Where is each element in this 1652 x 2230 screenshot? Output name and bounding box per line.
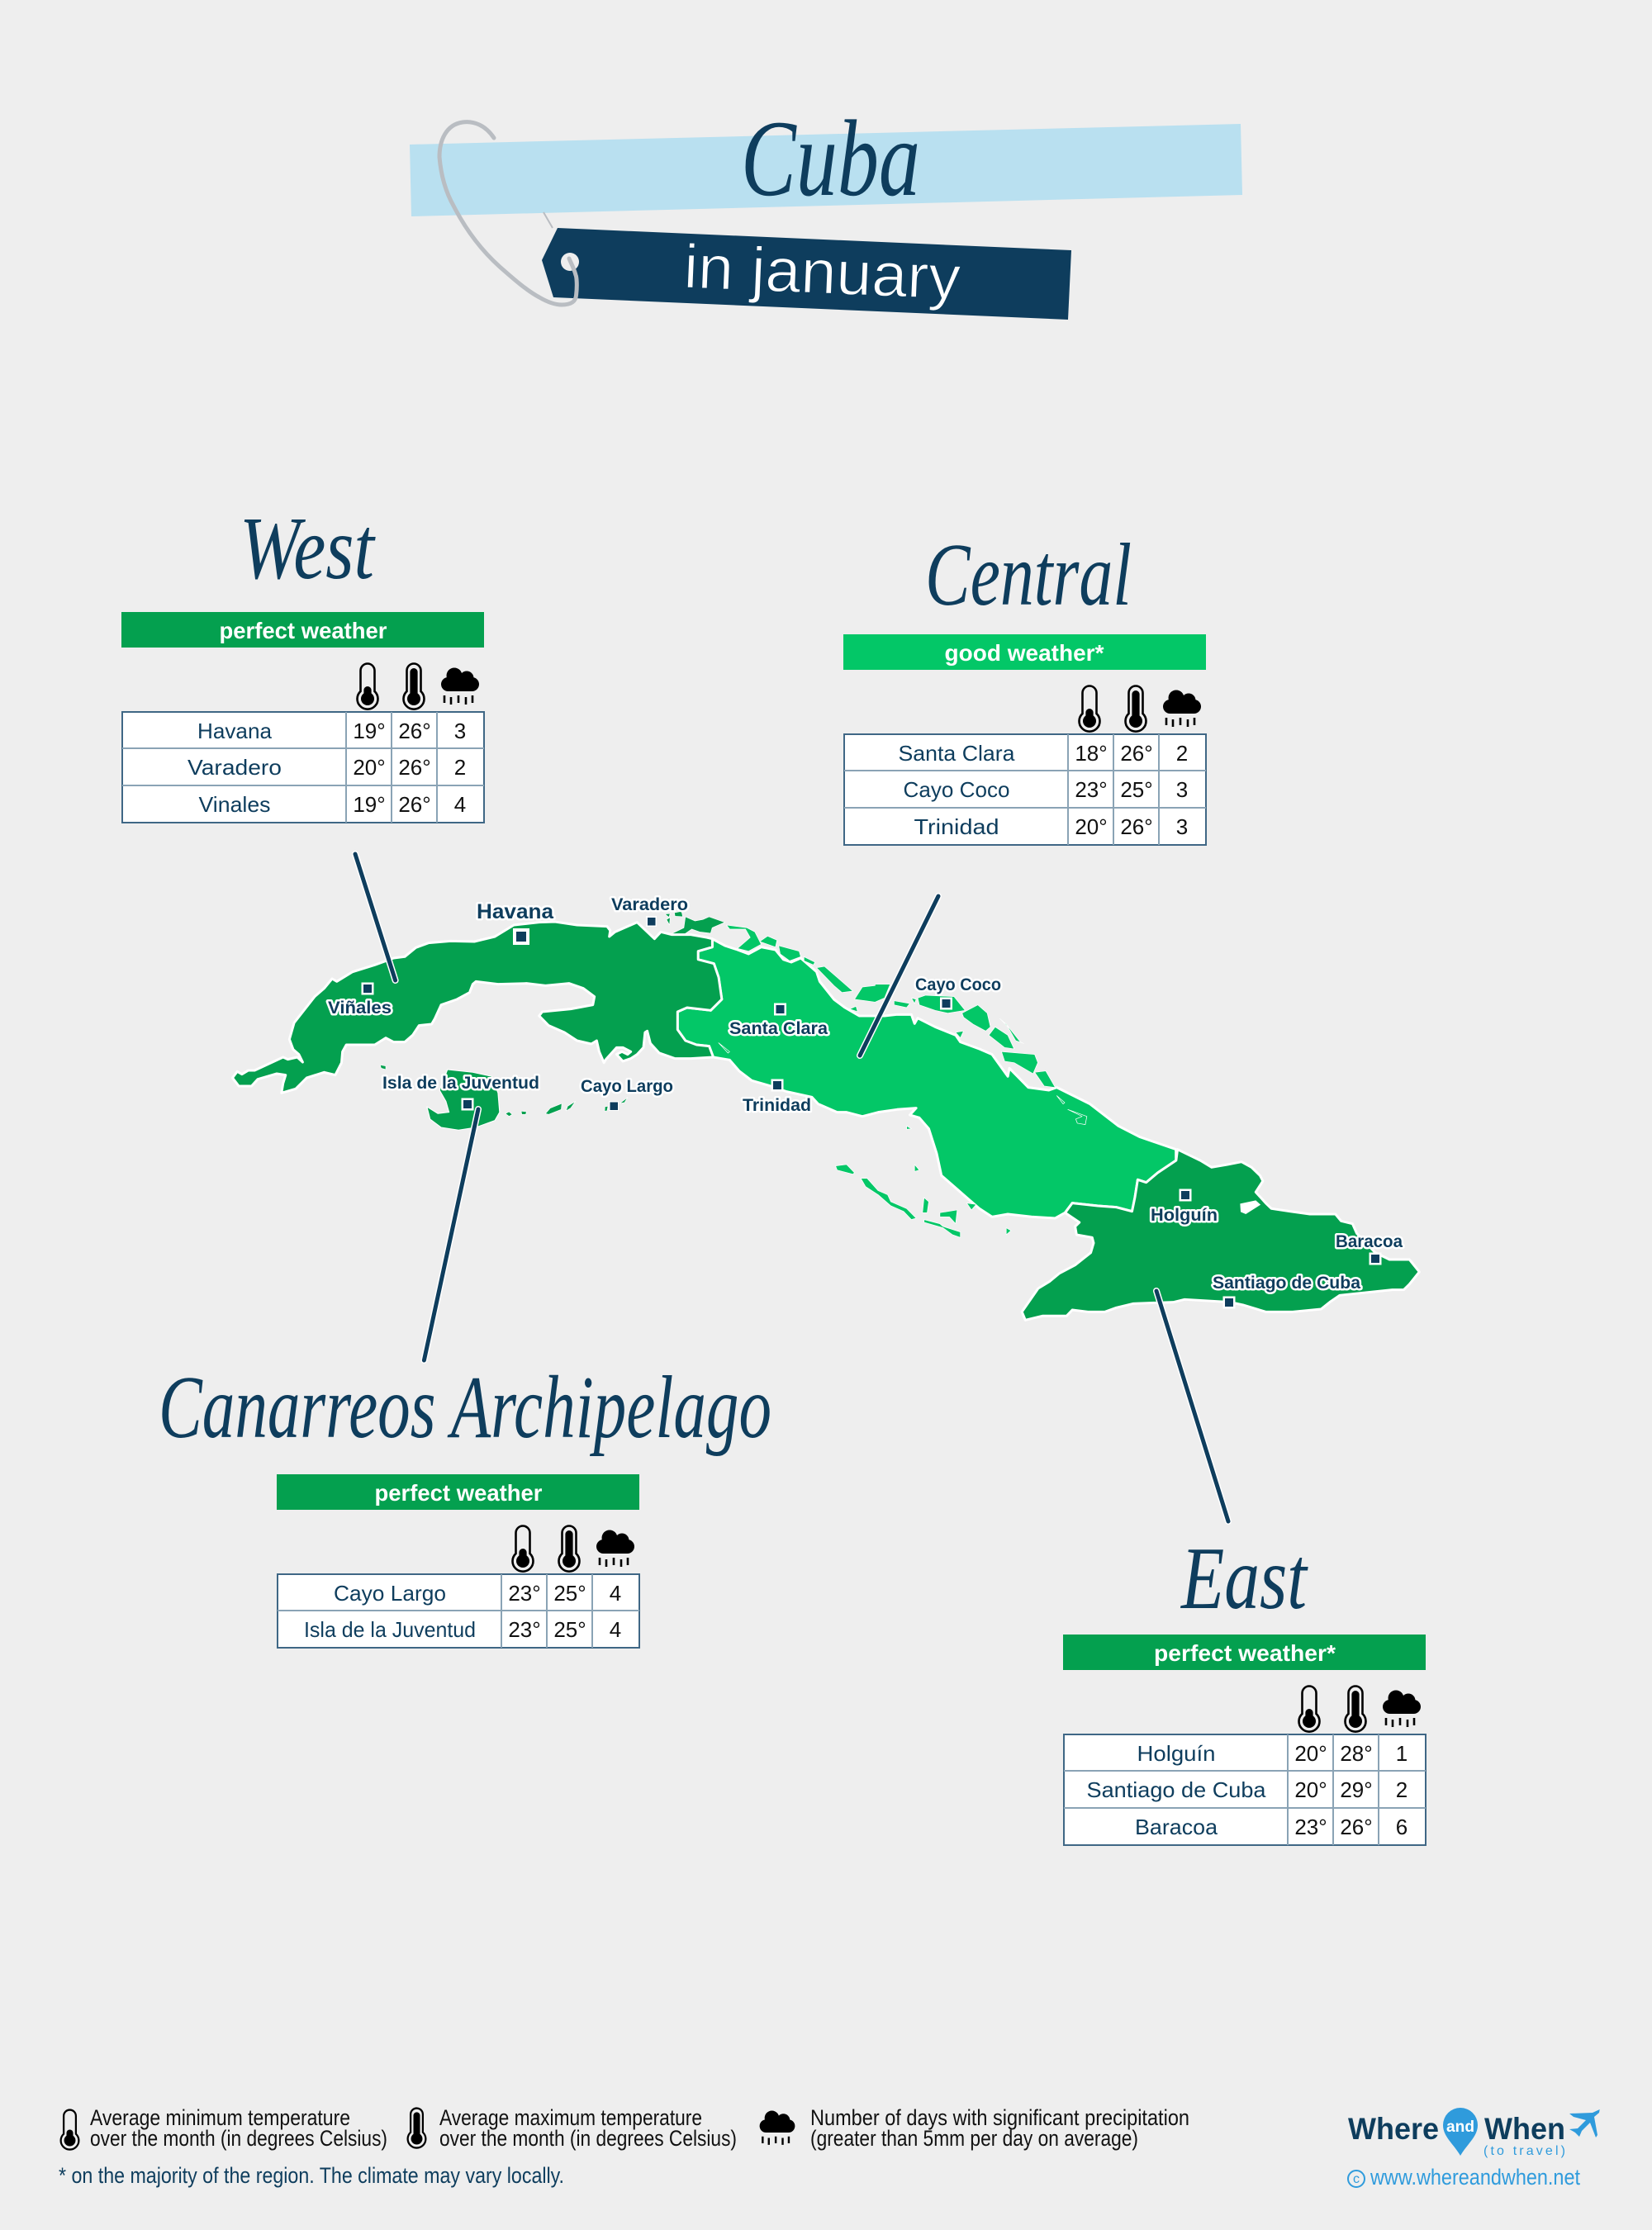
- marker: Varadero: [646, 916, 657, 927]
- marker: Havana: [513, 928, 529, 945]
- icon: copyright circle: [1348, 2171, 1365, 2187]
- label: Santa Clara: Santa Clara: [729, 1019, 828, 1038]
- marker: Santiago de Cuba: [1222, 1297, 1236, 1308]
- label: Baracoa: Baracoa: [1336, 1232, 1403, 1251]
- table: Cayo Coco: [904, 777, 1009, 802]
- icon: min thermometer: [357, 664, 378, 709]
- table: 25°: [553, 1617, 586, 1642]
- icon: min thermometer: [512, 1526, 534, 1572]
- title: Cuba: Cuba: [741, 97, 920, 219]
- icon: max thermometer: [558, 1526, 580, 1572]
- subtitle: in january: in january: [682, 231, 962, 312]
- logo word: When: When: [1484, 2112, 1565, 2146]
- table: 2: [1176, 741, 1188, 766]
- panel: canarreos archipelago: [159, 1359, 771, 1648]
- Nipe bay inlet: [1240, 1200, 1260, 1214]
- table: 23°: [508, 1581, 541, 1606]
- weather label: good weather*: [945, 640, 1104, 666]
- label: Havana: Havana: [477, 900, 554, 923]
- table: Isla de la Juventud: [304, 1617, 476, 1642]
- leader line: west: [355, 854, 396, 980]
- table: 26°: [398, 792, 431, 817]
- table: Santiago de Cuba: [1087, 1777, 1266, 1802]
- marker: Santa Clara: [774, 1003, 786, 1016]
- table: Varadero: [188, 755, 282, 780]
- panel: west: [121, 500, 484, 823]
- table: 26°: [1120, 814, 1153, 839]
- logo tagline: (to travel): [1483, 2144, 1565, 2158]
- label: Santiago de Cuba: Santiago de Cuba: [1213, 1274, 1360, 1293]
- table: 26°: [1120, 741, 1153, 766]
- metal tag ring: [439, 122, 577, 305]
- table: Cayo Largo: [334, 1581, 446, 1606]
- table: 26°: [1340, 1815, 1373, 1839]
- leader line: canarreos: [424, 1109, 478, 1360]
- table: Trinidad: [914, 814, 999, 839]
- marker: Cayo Coco: [940, 998, 952, 1009]
- footnote: * on the majority of the region. The climate may vary locally.: [59, 2163, 564, 2188]
- region: central: [665, 911, 1176, 1237]
- weather bar: [277, 1474, 639, 1510]
- legend text: minimum temperature: Average minimum temperature: [90, 2105, 350, 2130]
- icon: max thermometer: [1345, 1687, 1366, 1732]
- icon: legend min thermometer: [61, 2110, 78, 2150]
- marker: Vinales: [362, 983, 373, 994]
- table: 25°: [1120, 777, 1153, 802]
- legend text: maximum temperature: [439, 2105, 737, 2151]
- legend text: precipitation: [810, 2105, 1189, 2151]
- table: Vinales: [198, 792, 271, 817]
- table: 19°: [353, 719, 386, 743]
- table: 23°: [508, 1617, 541, 1642]
- panel: central: [843, 526, 1206, 845]
- heading: West: West: [240, 500, 376, 598]
- table: 4: [610, 1581, 621, 1606]
- legend text: maximum temperature: Average maximum temperature: [439, 2105, 702, 2130]
- table: 2: [454, 755, 466, 780]
- table: Havana: [197, 719, 273, 743]
- leader line: east: [1156, 1291, 1228, 1521]
- table: 29°: [1340, 1777, 1373, 1802]
- icon: rain cloud: [1383, 1690, 1421, 1727]
- table: 28°: [1340, 1741, 1373, 1766]
- map of Cuba: [232, 911, 1419, 1320]
- marker: Isla de la Juventud: [461, 1098, 474, 1110]
- table: [122, 712, 484, 823]
- cays: Sabana west: [665, 911, 725, 936]
- table: 23°: [1294, 1815, 1327, 1839]
- icon: legend rain cloud: [760, 2111, 795, 2145]
- table: 23°: [1075, 777, 1108, 802]
- region: Isla de la Juventud and cays: [380, 1065, 628, 1130]
- table: 26°: [398, 719, 431, 743]
- label: Varadero: Varadero: [611, 895, 688, 914]
- cays: north central: [719, 925, 1087, 1125]
- panel: east: [1063, 1530, 1426, 1845]
- legend text: minimum temperature: [90, 2105, 387, 2151]
- region: east: [1022, 1150, 1419, 1320]
- icon: max thermometer: [403, 664, 425, 709]
- marker: Baracoa: [1370, 1252, 1381, 1265]
- table: Baracoa: [1135, 1815, 1218, 1839]
- legend text: precipitation: Number of days with significant precipitation: [810, 2105, 1189, 2130]
- region: west: [232, 922, 722, 1130]
- logo url: www.whereandwhen.net: [1370, 2165, 1580, 2190]
- label: Isla de la Juventud: Isla de la Juventud: [382, 1074, 539, 1093]
- table: 4: [610, 1617, 621, 1642]
- weather label: perfect weather: [220, 618, 387, 643]
- table: 25°: [553, 1581, 586, 1606]
- navy luggage tag: [542, 228, 1071, 320]
- title block: [410, 97, 1242, 320]
- table: Santa Clara: [899, 741, 1015, 766]
- table: 3: [1176, 814, 1188, 839]
- legend: [61, 2105, 1189, 2151]
- icon: rain cloud: [596, 1530, 634, 1567]
- legend text: precipitation: (greater than 5mm per day on average): [810, 2126, 1138, 2151]
- icon: map pin: [1443, 2108, 1478, 2156]
- title band: [410, 124, 1242, 216]
- table: 1: [1396, 1741, 1408, 1766]
- heading: Central: Central: [925, 526, 1132, 624]
- table: 3: [454, 719, 466, 743]
- tag hole: [561, 253, 579, 271]
- table: 20°: [1294, 1741, 1327, 1766]
- logo word: Where: Where: [1348, 2112, 1439, 2146]
- table: [844, 734, 1206, 845]
- label: Vinales: Viñales: [328, 999, 392, 1018]
- table: 20°: [353, 755, 386, 780]
- label: Cayo Largo: Cayo Largo: [581, 1077, 673, 1096]
- leader line: central: [860, 896, 938, 1056]
- table: 19°: [353, 792, 386, 817]
- heading: East: East: [1180, 1530, 1308, 1628]
- logo word: and: and: [1446, 2118, 1474, 2136]
- cays: south central: [836, 1126, 1011, 1237]
- logo: Where and When: [1348, 2108, 1600, 2190]
- table: 4: [454, 792, 466, 817]
- tag string: [544, 212, 553, 228]
- icon: rain cloud: [1163, 690, 1201, 727]
- label: Holguin: Holguín: [1151, 1206, 1218, 1225]
- table: 18°: [1075, 741, 1108, 766]
- table: 3: [1176, 777, 1188, 802]
- icon: max thermometer: [1125, 686, 1146, 732]
- legend text: maximum temperature: over the month (in degrees Celsius): [439, 2126, 737, 2151]
- icon: rain cloud: [441, 667, 479, 705]
- marker: Holguin: [1180, 1189, 1191, 1201]
- weather bar: [1063, 1635, 1426, 1670]
- heading: Canarreos Archipelago: Canarreos Archipelago: [159, 1359, 771, 1457]
- marker: Trinidad: [771, 1079, 783, 1092]
- label: Cayo Coco: Cayo Coco: [915, 975, 1001, 994]
- table: 26°: [398, 755, 431, 780]
- icon: copyright circle: c: [1353, 2172, 1360, 2186]
- table: Holguín: [1137, 1741, 1216, 1766]
- icon: legend max thermometer: [408, 2109, 425, 2148]
- marker: Cayo Largo: [609, 1101, 619, 1111]
- table: 20°: [1294, 1777, 1327, 1802]
- table: 20°: [1075, 814, 1108, 839]
- map markers and labels: [328, 895, 1403, 1308]
- table: 2: [1396, 1777, 1408, 1802]
- table: 6: [1396, 1815, 1408, 1839]
- weather label: perfect weather: [375, 1480, 543, 1506]
- weather bar: [121, 612, 484, 648]
- label: Trinidad: Trinidad: [743, 1096, 811, 1115]
- icon: plane: [1569, 2109, 1600, 2137]
- weather label: perfect weather*: [1154, 1640, 1336, 1666]
- table: [1064, 1734, 1426, 1845]
- weather bar: [843, 634, 1206, 670]
- table: [278, 1574, 639, 1648]
- legend text: minimum temperature: over the month (in degrees Celsius): [90, 2126, 387, 2151]
- icon: min thermometer: [1298, 1687, 1320, 1732]
- icon: min thermometer: [1079, 686, 1100, 732]
